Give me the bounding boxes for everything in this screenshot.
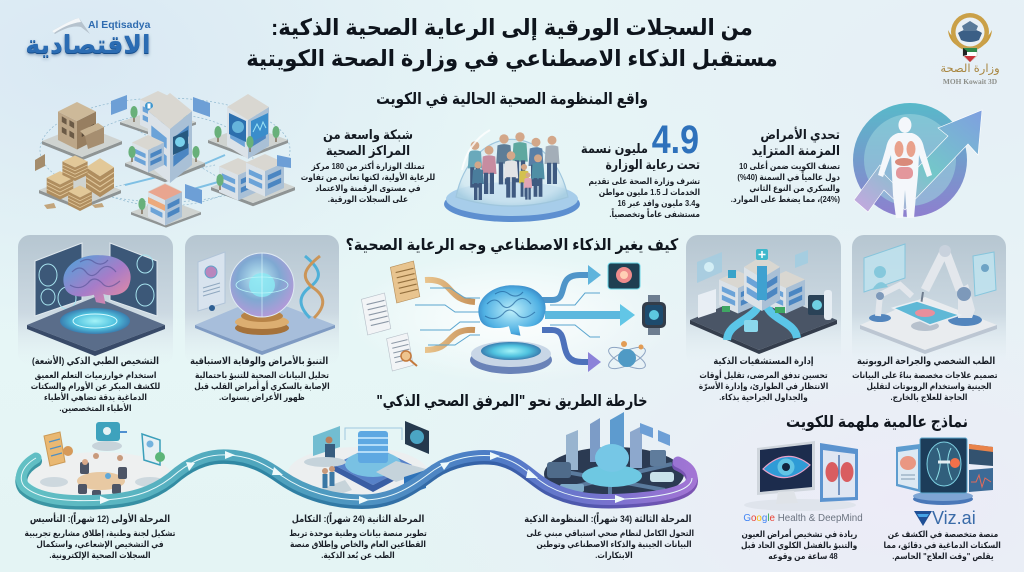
- card text: الحاجة للعلاج بالخارج.: [891, 392, 967, 402]
- text: chronic disease description: دول عالمياً في السمنة (40%): [737, 172, 840, 182]
- icon: Kuwait emblem: [948, 13, 992, 62]
- stage text: القطاعين العام والخاص وإطلاق منصة: [290, 539, 426, 549]
- card text: [31, 370, 160, 413]
- stage text: [526, 528, 694, 560]
- text: stage three: [524, 512, 694, 560]
- model text: السكتات الدماغية في دقائق، مما: [884, 540, 1001, 550]
- text: network description: [301, 160, 435, 204]
- card title: إدارة المستشفيات الذكية: [713, 356, 814, 367]
- heading: under ministry care: تحت رعاية الوزارة: [606, 157, 700, 172]
- icon: Viz.ai mark: [914, 511, 932, 526]
- illustration: crystal ball and DNA: [185, 235, 339, 355]
- ribbon: under side: [21, 458, 692, 504]
- platform: stage two: [288, 421, 430, 499]
- stage text: [25, 528, 175, 560]
- stage text: تطوير منصة بيانات وطنية موحدة تربط: [289, 528, 427, 538]
- heading: network: المراكز الصحية: [326, 143, 410, 158]
- heading: how AI changes healthcare: كيف يغير الذكاء الاصطناعي وجه الرعاية الصحية؟: [346, 237, 678, 254]
- card text: الجينية واستخدام الروبوتات لتقليل: [867, 381, 991, 391]
- title: من السجلات الورقية إلى الرعاية الصحية الذكية:: [271, 15, 753, 40]
- illustration: isometric health network: [35, 91, 295, 228]
- card title: التشخيص الطبي الذكي (الأشعة): [32, 356, 159, 367]
- panel: AI diagnosis card: [18, 235, 173, 413]
- logo latin name: MOH Kowait 3D: [943, 77, 997, 86]
- logo arabic name: وزارة الصحة: [940, 63, 1000, 75]
- panel: personalised medicine and robotic surgery card: [852, 235, 1006, 402]
- logo: Ministry of Health Kuwait: [940, 13, 1000, 86]
- model text: [741, 528, 857, 561]
- text: chronic disease description: [731, 160, 840, 204]
- icon: molecule: [606, 341, 648, 373]
- card text: تحليل البيانات الصحية للتنبؤ باحتمالية: [195, 370, 329, 380]
- illustration: human body with rising arrow: [853, 103, 982, 218]
- label: million people: مليون نسمة: [581, 141, 648, 156]
- stage text: البيانات الجينية والذكاء الاصطناعي وتوطين: [536, 539, 692, 549]
- illustration: AI transforming records into outcomes: [361, 260, 666, 374]
- text: chronic disease description: تصنف الكويت ضمن أعلى 10: [739, 161, 840, 171]
- card text: الأطباء المتخصصين.: [59, 403, 132, 413]
- heading: chronic disease: [752, 126, 840, 158]
- text: chronic disease description: والسكري من النوع الثاني: [749, 183, 840, 193]
- logo arabic name: الاقتصادية: [25, 31, 151, 59]
- stat: 4.9: 4.9: [652, 118, 699, 162]
- arrows: AI output: [542, 265, 635, 372]
- logo: Google Health & DeepMind: Google Health & DeepMind: [743, 513, 863, 524]
- text: population description: الخدمات لـ 1.5 مليون مواطن: [599, 187, 700, 197]
- heading: chronic disease: المزمنة المتزايد: [752, 143, 840, 158]
- stage text: السجلات الصحية الإلكترونية.: [49, 550, 151, 560]
- logo: Al Eqtisadya: [25, 18, 151, 60]
- panel: Google Health and DeepMind: [741, 441, 863, 561]
- chart: roadmap ribbon with three stages: [15, 412, 698, 510]
- stage text: التحول الكامل لنظام صحي استباقي مبني على: [526, 528, 694, 538]
- text: network description: للرعاية الأولية، لكنها تعاني من تفاوت: [301, 172, 435, 182]
- panel: network of health centres: [35, 91, 435, 228]
- icon: smart watch: [642, 295, 666, 335]
- stage text: [289, 528, 427, 560]
- stage title: المرحلة الثالثة (34 شهراً): المنظومة الذكية: [524, 514, 691, 525]
- stage text: الابتكارات.: [595, 550, 633, 560]
- card text: الدماغية بدقة تضاهي الأطباء: [44, 392, 147, 402]
- card text: تصميم علاجات مخصصة بناءً على البيانات: [852, 370, 998, 380]
- text: network description: على السجلات الورقية.: [328, 194, 408, 204]
- card text: والجداول الجراحية بذكاء.: [719, 392, 808, 402]
- card text: ظهور الأعراض بسنوات.: [219, 392, 305, 402]
- model text: [885, 529, 1001, 562]
- card title: الطب الشخصي والجراحة الروبوتية: [857, 356, 995, 367]
- heading: current health system: واقع المنظومة الصحية الحالية في الكويت: [376, 91, 648, 108]
- logo: Viz.ai: [878, 509, 1008, 529]
- panel: smart hospital management card: [686, 235, 841, 402]
- model text: 48 ساعة من وقوعه: [768, 551, 838, 561]
- heading: roadmap: خارطة الطريق نحو "المرفق الصحي الذكي": [376, 393, 648, 410]
- panel: disease prediction card: [185, 235, 339, 402]
- model text: منصة متخصصة في الكشف عن: [888, 529, 998, 539]
- text: network description: تمتلك الوزارة أكثر من 180 مركز: [311, 161, 425, 171]
- heading: network: [323, 127, 413, 158]
- icon: brain screen: [608, 263, 640, 289]
- panel: population under care: [444, 118, 700, 222]
- model text: يقلص "وقت العلاج" الحاسم.: [892, 551, 994, 561]
- text: network description: في مستوى الرقمنة والاعتماد: [315, 183, 421, 193]
- card text: الانتظار في الطوارئ، وإدارة الأسرّة: [699, 381, 828, 391]
- arrows on ribbon: [100, 451, 626, 504]
- illustration: people under glass dome: [444, 130, 580, 222]
- stage text: تشكيل لجنة وطنية، إطلاق مشاريع تجريبية: [25, 528, 175, 538]
- title: [246, 15, 778, 72]
- card text: للكشف المبكر عن الأورام والسكتات: [31, 381, 160, 391]
- illustration: robotic surgery: [852, 235, 1006, 354]
- stage title: المرحلة الأولى (12 شهراً): التأسيس: [30, 514, 170, 525]
- card text: استخدام خوارزميات التعلم العميق: [35, 370, 156, 380]
- illustration: glowing brain on platform: [18, 235, 173, 356]
- icon: logo swoosh: [52, 18, 90, 34]
- text: stage two: [289, 512, 427, 560]
- text: population description: [588, 176, 700, 219]
- heading: global models: نماذج عالمية ملهمة للكويت: [786, 414, 968, 431]
- stage title: المرحلة الثانية (24 شهراً): التكامل: [292, 514, 424, 525]
- illustration: brain scan screens: [878, 436, 1008, 512]
- model text: ريادة في تشخيص أمراض العيون: [741, 529, 857, 539]
- text: chronic disease description: (24%)، مما يضغط على الموارد.: [731, 194, 840, 204]
- card text: تحسين تدفق المرضى، تقليل أوقات: [699, 370, 828, 380]
- platform: stage one: [28, 422, 172, 500]
- panel: chronic disease challenge: [731, 103, 982, 218]
- illustration: eye on monitor and kidneys: [744, 441, 858, 511]
- model text: والتنبؤ بالفشل الكلوي الحاد قبل: [741, 540, 857, 550]
- flows: paper data to brain: [395, 280, 480, 350]
- card text: [194, 370, 330, 402]
- card text: [852, 370, 998, 402]
- text: population description: مستشفى عاماً وتخصصياً.: [609, 209, 700, 219]
- logo latin name: Al Eqtisadya: [88, 20, 150, 31]
- title: مستقبل الذكاء الاصطناعي في وزارة الصحة الكويتية: [246, 46, 778, 70]
- stage text: الطب عن بُعد الذكية.: [321, 550, 395, 560]
- text: population description: و3.4 مليون وافد عبر 16: [618, 198, 700, 208]
- card text: الإصابة بالسكري أو أمراض القلب قبل: [194, 381, 330, 391]
- logo wordmark: Viz.ai: [932, 508, 976, 528]
- panel: Viz.ai: [878, 436, 1008, 560]
- illustration: smart hospital: [686, 235, 841, 354]
- heading: chronic disease: تحدي الأمراض: [760, 127, 840, 142]
- card title: التنبؤ بالأمراض والوقاية الاستباقية: [190, 356, 328, 367]
- heading: network: شبكة واسعة من: [323, 127, 413, 142]
- text: population description: تشرف وزارة الصحة على تقديم: [588, 176, 700, 186]
- ribbon: top road: [21, 455, 692, 501]
- platform: stage three city: [544, 412, 684, 501]
- text: stage one: [25, 512, 175, 560]
- stage text: في التشخيص الإشعاعي، واستكمال: [36, 539, 164, 549]
- card text: [699, 370, 828, 402]
